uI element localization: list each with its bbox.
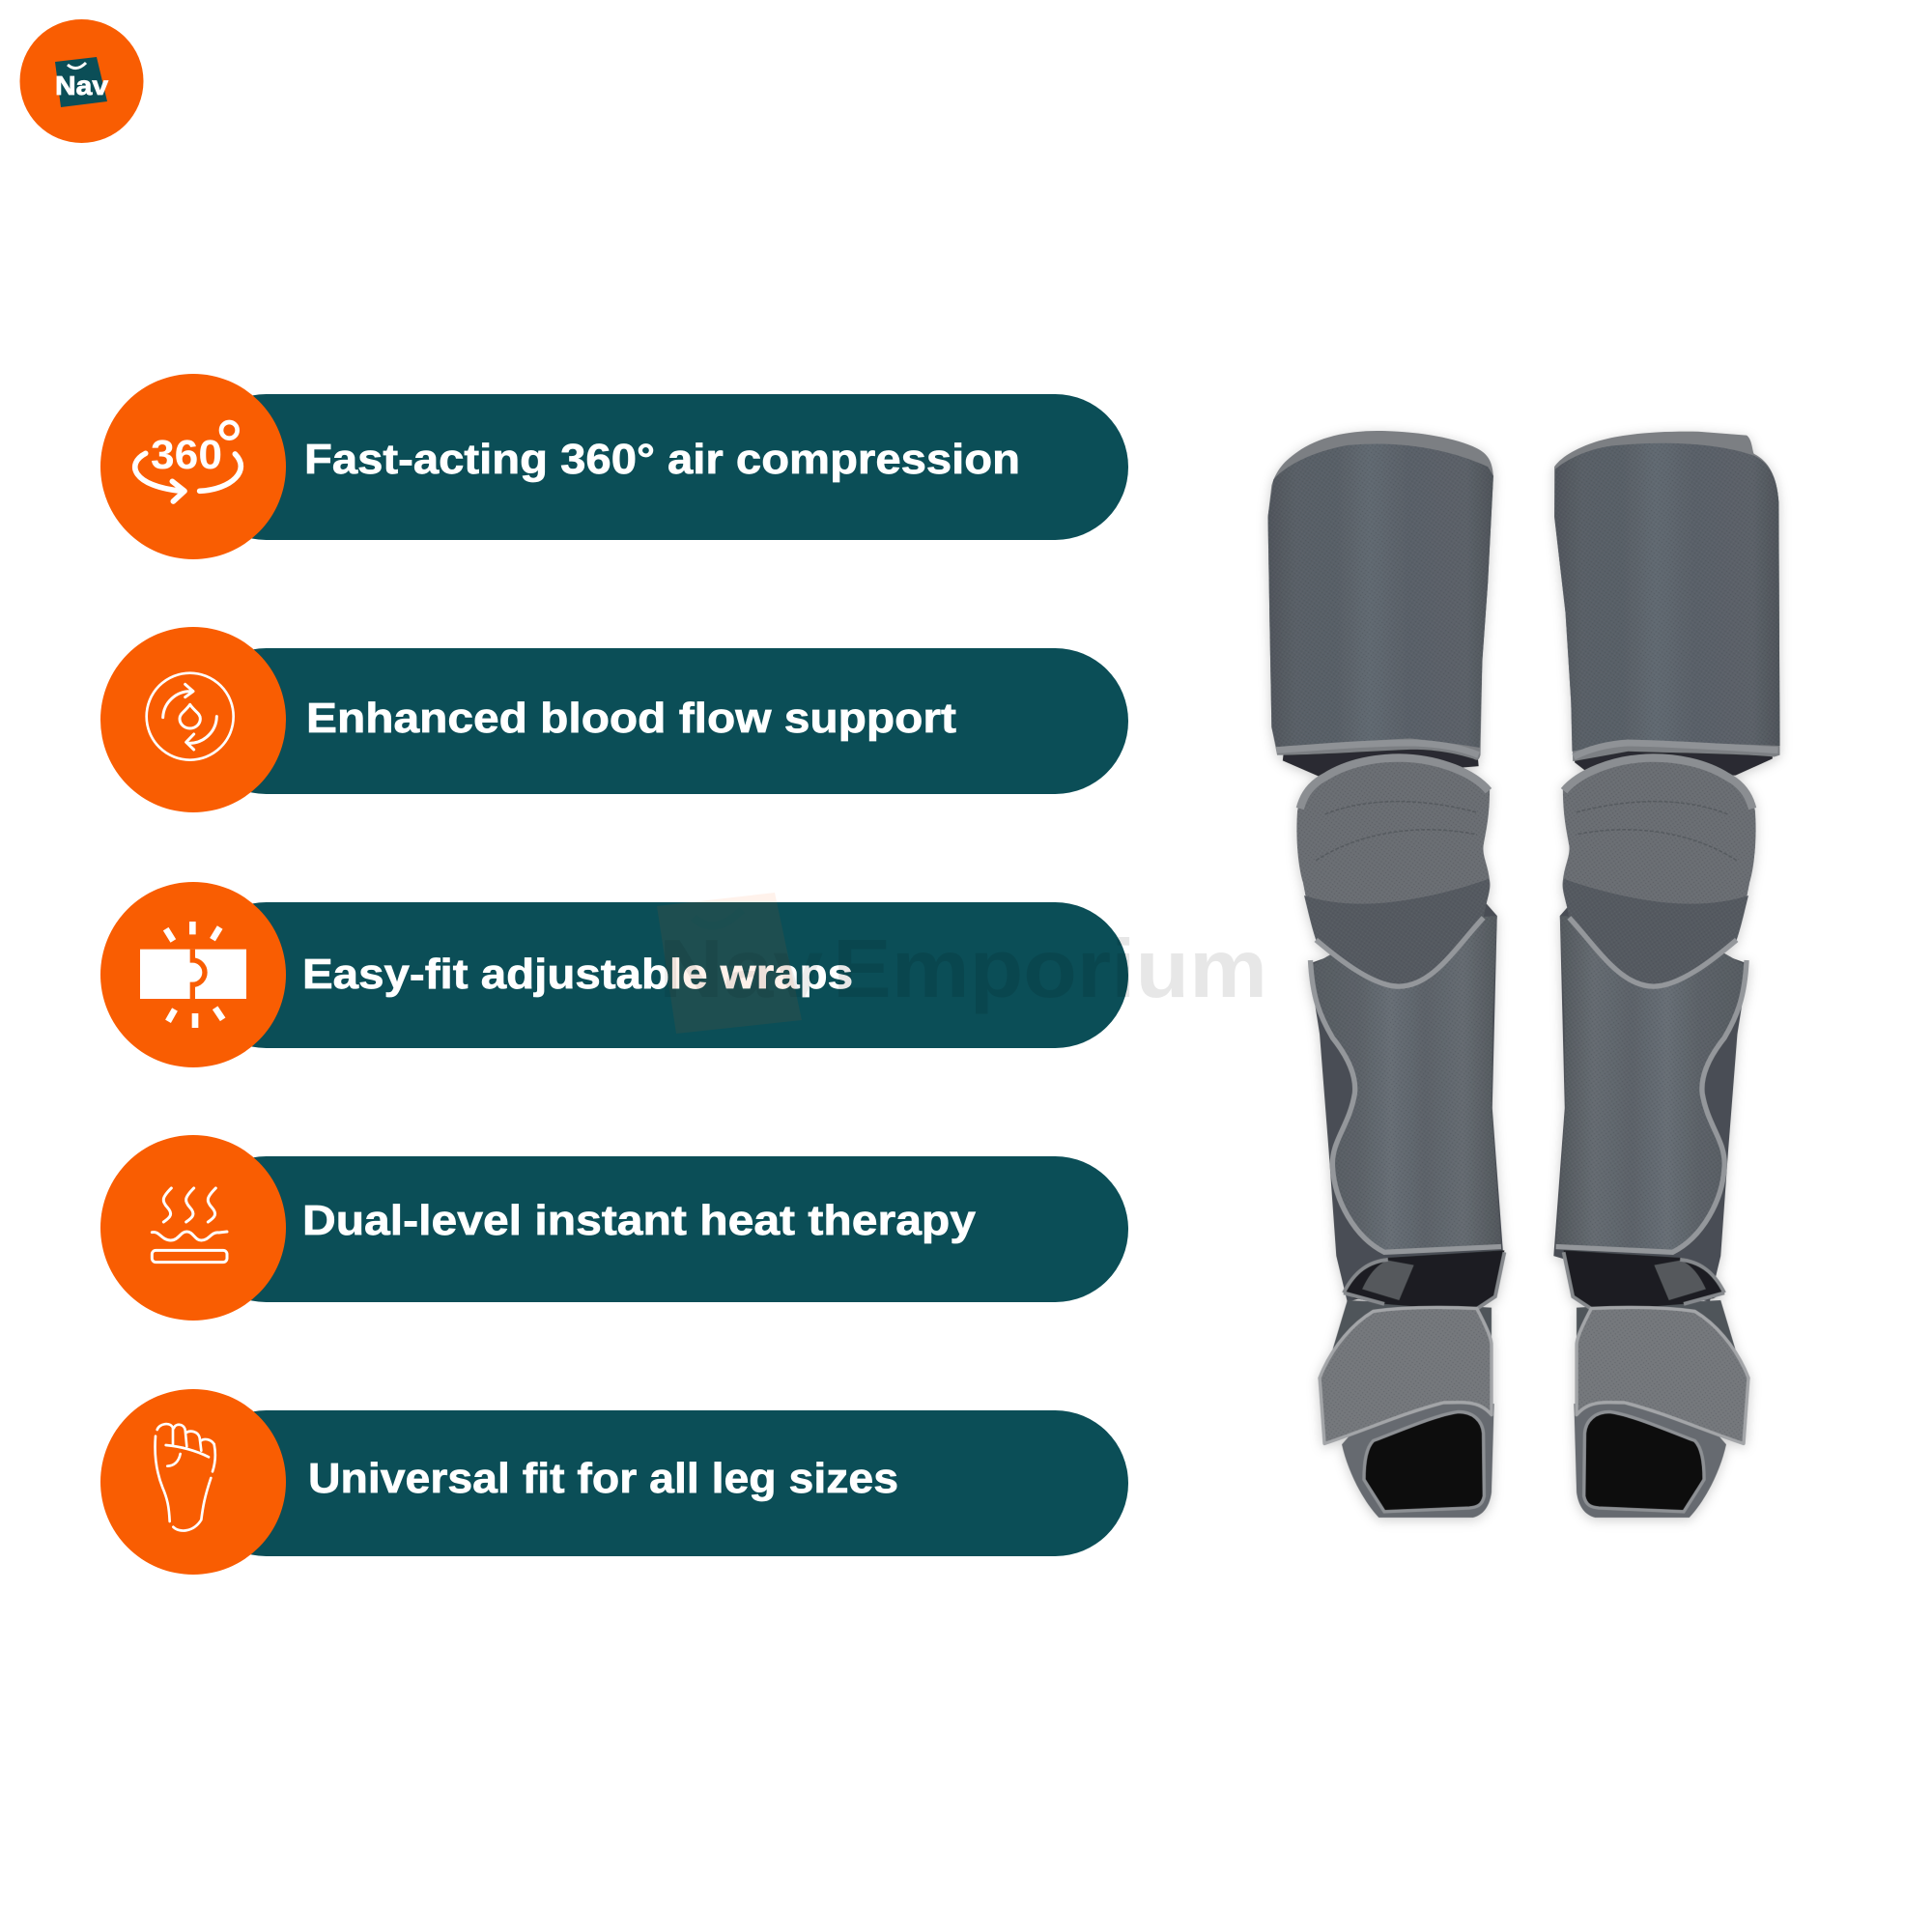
label 3: Easy-fit adjustable wraps (302, 951, 853, 998)
circle 1 (100, 374, 286, 559)
icon: blood flow (147, 673, 234, 760)
logo badge (19, 19, 143, 143)
circle 4 (100, 1135, 286, 1321)
left foot wrap (1320, 1250, 1504, 1518)
right knee wrap (1562, 754, 1756, 986)
feature row 3 (100, 882, 1128, 1067)
watermark wordmark: Emporium (833, 923, 1267, 1015)
icon: 360 rotation: 360 (151, 432, 222, 478)
left calf wrap (1309, 901, 1503, 1302)
right foot wrap (1564, 1250, 1748, 1518)
feature row 5 (100, 1389, 1128, 1575)
logo bag (55, 57, 107, 107)
label 2: Enhanced blood flow support (306, 695, 956, 742)
watermark smile (694, 910, 742, 925)
left knee wrap (1296, 754, 1490, 986)
icon: foot (155, 1424, 215, 1531)
bar 4 (193, 1156, 1128, 1302)
watermark brand: Nav (659, 923, 823, 1015)
circle 2 (100, 627, 286, 812)
bar 5 (193, 1410, 1128, 1556)
left thigh wrap (1268, 431, 1493, 779)
feature row 1 (100, 374, 1128, 559)
right calf wrap (1553, 901, 1748, 1302)
bar 2 (193, 648, 1128, 794)
feature row 4 (100, 1135, 1128, 1321)
icon: fitting puzzle (140, 922, 246, 1028)
circle 5 (100, 1389, 286, 1575)
label 1: Fast-acting 360° air compression (304, 436, 1020, 483)
right thigh wrap (1554, 432, 1779, 776)
label 5: Universal fit for all leg sizes (308, 1455, 898, 1502)
logo smile (68, 63, 86, 69)
bar 1 (193, 394, 1128, 540)
product: leg compression wraps (1268, 431, 1779, 1518)
watermark bag (657, 893, 802, 1034)
watermark (657, 893, 1267, 1034)
icon: heat therapy (152, 1188, 227, 1263)
circle 3 (100, 882, 286, 1067)
logo wordmark: Nav (55, 71, 108, 100)
feature row 2 (100, 627, 1128, 812)
label 4: Dual-level instant heat therapy (302, 1197, 977, 1244)
icon: 360 rotation (135, 422, 241, 501)
bar 3 (193, 902, 1128, 1048)
